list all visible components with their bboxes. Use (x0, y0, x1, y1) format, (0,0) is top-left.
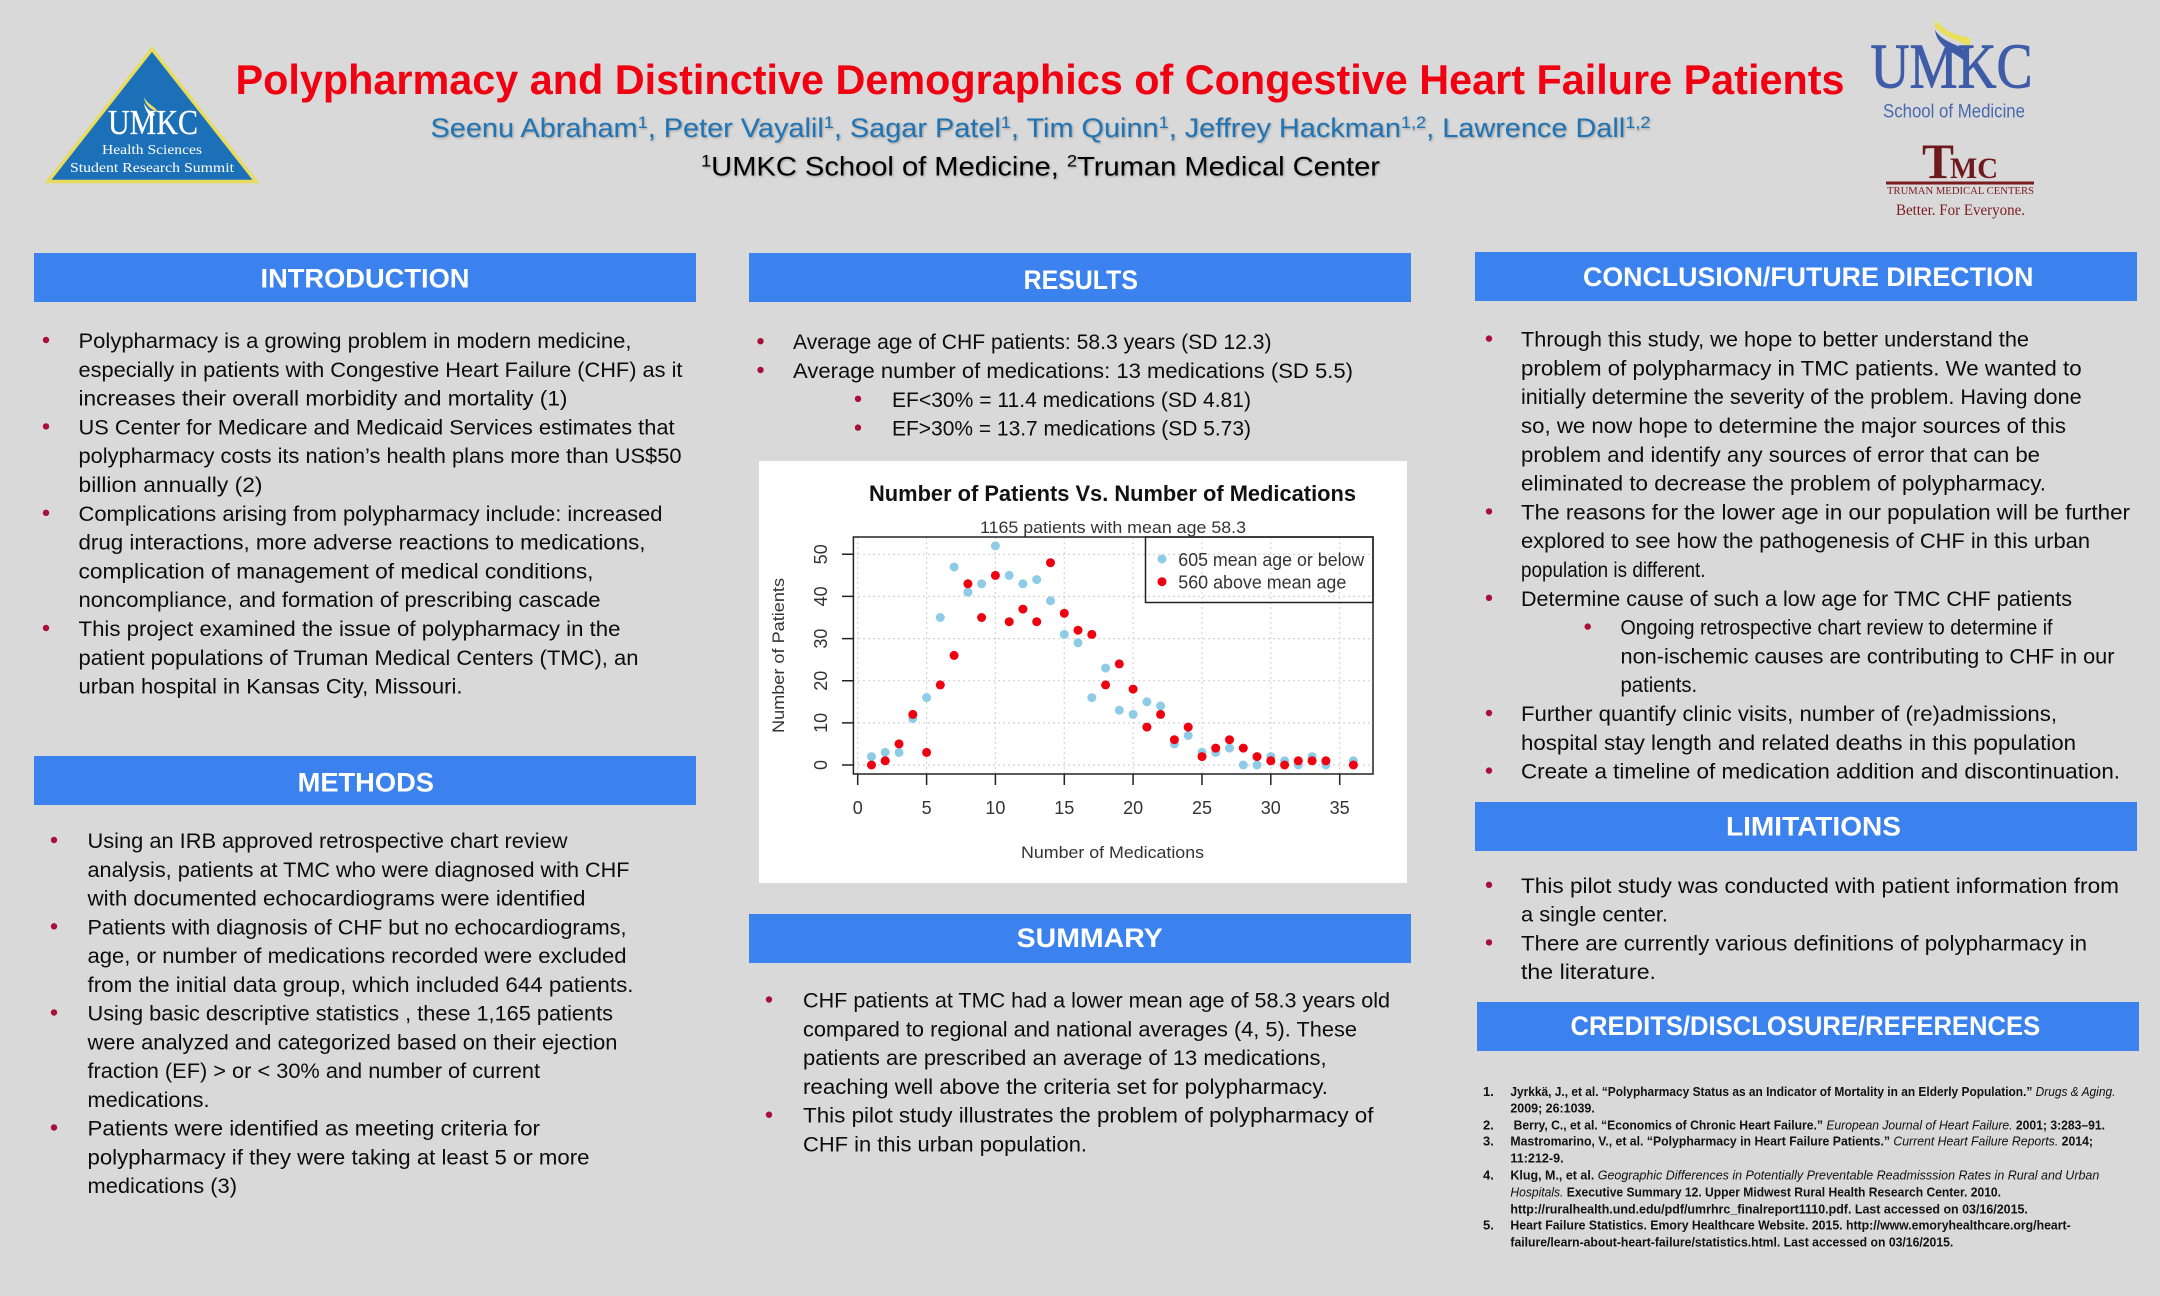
text block: conclusion bullets: Create a timeline of medication addition and discontinuation. (1521, 761, 2120, 784)
legend: 560 above mean age (1178, 572, 1346, 592)
series: 605 mean age or below (867, 541, 1358, 770)
title: Polypharmacy and Distinctive Demographics of Congestive Heart Failure Patients (236, 56, 1844, 103)
text block: conclusion bullets: eliminated to decrease the problem of polypharmacy. (1521, 473, 2046, 496)
scatter chart: number of patients vs number of medications (759, 461, 1407, 883)
reference list: 2. (1483, 1117, 1494, 1132)
authors: , Peter Vayalil (648, 113, 824, 143)
text block: conclusion bullets: initially determine the severity of the problem. Having done (1521, 386, 2082, 409)
reference list: 5. (1483, 1218, 1494, 1233)
panel: results (749, 253, 1411, 883)
text block: summary bullets: CHF patients at TMC had a lower mean age of 58.3 years old (803, 990, 1390, 1012)
text block: conclusion bullets: Ongoing retrospective chart review to determine if (1620, 617, 2053, 640)
x axis labels: 0 (853, 798, 863, 818)
reference list: Berry, C., et al. “Economics of Chronic Heart Failure.” European Journal of Heart Failure. 2001; 3:283–91. (1514, 1117, 2105, 1132)
text block: limitations bullets (1486, 875, 2119, 984)
heading: credits/disclosure/references (1477, 1002, 2139, 1051)
panel: methods (34, 756, 696, 1198)
text block: methods bullets: with documented echocardiograms were identified (86, 888, 586, 910)
text block: introduction bullets: drug interactions, more adverse reactions to medications, (78, 532, 646, 555)
y axis labels: 40 (811, 586, 831, 606)
text block: methods bullets: age, or number of medications recorded were excluded (88, 945, 626, 968)
authors: 1 (638, 113, 648, 132)
heading: introduction: INTRODUCTION (260, 264, 470, 294)
heading: conclusion/future direction (1475, 252, 2137, 301)
logo: UMKC Health Sciences Student Research Summit: UMKC (108, 103, 198, 142)
y axis labels: 10 (811, 713, 831, 733)
reference list: 11:212-9. (1510, 1150, 1564, 1165)
reference list: Jyrkkä, J., et al. “Polypharmacy Status as an Indicator of Mortality in an Elderly Population.” Drugs & Aging. (1510, 1084, 2115, 1099)
text block: introduction bullets: especially in patients with Congestive Heart Failure (CHF) as it (78, 359, 683, 382)
text block: summary bullets: patients are prescribed an average of 13 medications, (803, 1047, 1327, 1070)
text block: introduction bullets: noncompliance, and formation of prescribing cascade (78, 589, 600, 612)
text block: conclusion bullets: Through this study, we hope to better understand the (1521, 329, 2029, 352)
text block: introduction bullets: This project examined the issue of polypharmacy in the (78, 618, 620, 641)
x axis labels: 10 (985, 798, 1005, 818)
heading: methods (34, 756, 696, 805)
authors: 1 (1001, 113, 1011, 132)
affiliations: UMKC School of Medicine, (711, 152, 1067, 182)
reference list: 2009; 26:1039. (1510, 1101, 1595, 1116)
heading: results: RESULTS (1024, 265, 1138, 295)
text block: introduction bullets: billion annually (2) (78, 474, 262, 497)
authors: , Sagar Patel (834, 113, 1001, 143)
chart subtitle: 1165 patients with mean age 58.3 (980, 518, 1246, 537)
chart title: Number of Patients Vs. Number of Medications (869, 481, 1356, 506)
heading: limitations: LIMITATIONS (1726, 812, 1901, 842)
text block: introduction bullets: Complications arising from polypharmacy include: increased (78, 503, 662, 526)
authors: 1,2 (1401, 113, 1426, 132)
panel: introduction (34, 253, 696, 699)
text block: conclusion bullets: explored to see how the pathogenesis of CHF in this urban (1521, 530, 2090, 553)
affiliations: Truman Medical Center (1077, 152, 1380, 182)
x axis labels: 20 (1123, 798, 1143, 818)
legend (1146, 537, 1373, 602)
x axis labels: 5 (922, 798, 932, 818)
text block: introduction bullets: increases their overall morbidity and mortality (1) (78, 388, 568, 411)
text block: methods bullets: from the initial data group, which included 644 patients. (88, 974, 634, 997)
series: 560 above mean age (867, 558, 1358, 770)
text block: methods bullets: polypharmacy if they were taking at least 5 or more (88, 1146, 590, 1169)
text block: conclusion bullets: hospital stay length and related deaths in this population (1521, 732, 2076, 755)
text block: conclusion bullets: The reasons for the lower age in our population will be further (1521, 501, 2130, 524)
logo: UMKC Health Sciences Student Research Summit: Health Sciences (102, 143, 202, 158)
text block: conclusion bullets: Further quantify clinic visits, number of (re)admissions, (1521, 703, 2057, 726)
affiliations: 1 (701, 152, 711, 170)
text block: limitations bullets: There are currently various definitions of polypharmacy in (1521, 932, 2087, 955)
text block: methods bullets (51, 830, 634, 1198)
text block: methods bullets: fraction (EF) > or < 30% and number of current (88, 1060, 540, 1083)
reference list: 3. (1483, 1134, 1494, 1149)
logo: Truman Medical Centers: TRUMAN MEDICAL CENTERS (1887, 186, 2034, 197)
reference list: Heart Failure Statistics. Emory Healthcare Website. 2015. http://www.emoryhealthcare.org/heart- (1510, 1218, 2071, 1233)
text block: conclusion bullets: so, we now hope to determine the major sources of this (1521, 415, 2066, 438)
text block: conclusion bullets: patients. (1620, 674, 1697, 697)
text block: introduction bullets: patient populations of Truman Medical Centers (TMC), an (78, 647, 638, 670)
text block: methods bullets: medications (3) (88, 1175, 237, 1198)
x axis title: Number of Medications (1021, 843, 1204, 862)
reference list: 1. (1483, 1084, 1494, 1099)
heading: summary (749, 914, 1411, 963)
text block: introduction bullets (43, 330, 683, 699)
text block: summary bullets: This pilot study illustrates the problem of polypharmacy of (803, 1105, 1374, 1128)
text block: methods bullets: Patients with diagnosis of CHF but no echocardiograms, (88, 916, 626, 939)
text block: summary bullets: compared to regional and national averages (4, 5). These (803, 1018, 1357, 1041)
text block: introduction bullets: Polypharmacy is a growing problem in modern medicine, (78, 330, 632, 353)
affiliations: 2 (1067, 152, 1077, 170)
reference list: Mastromarino, V., et al. “Polypharmacy in Heart Failure Patients.” Current Heart Failure Reports. 2014; (1510, 1134, 2093, 1149)
panel: conclusion and future direction (1475, 252, 2137, 784)
authors: 1 (824, 113, 834, 132)
heading: credits/disclosure/references: CREDITS/DISCLOSURE/REFERENCES (1570, 1011, 2040, 1041)
y axis title: Number of Patients (769, 578, 788, 733)
authors: 1 (1159, 113, 1169, 132)
heading: limitations (1475, 802, 2137, 851)
text block: introduction bullets: US Center for Medicare and Medicaid Services estimates that (78, 416, 675, 439)
plot frame and axes (842, 537, 1373, 785)
x axis labels: 35 (1330, 798, 1350, 818)
logo: Truman Medical Centers (1886, 133, 2034, 219)
text block: summary bullets: CHF in this urban population. (803, 1134, 1087, 1156)
panel: summary (749, 914, 1411, 1156)
logo: Truman Medical Centers: T (1922, 133, 1954, 189)
text block: conclusion bullets: population is different. (1521, 559, 1706, 582)
authors: , Tim Quinn (1011, 113, 1159, 143)
heading: results (749, 253, 1411, 302)
authors: 1,2 (1625, 113, 1651, 132)
text block: conclusion bullets: non-ischemic causes are contributing to CHF in our (1620, 645, 2114, 668)
y axis labels: 50 (811, 544, 831, 564)
text block: results bullets (757, 331, 1353, 441)
logo: Truman Medical Centers: MC (1950, 152, 1998, 185)
authors: , Lawrence Dall (1426, 113, 1625, 143)
text block: conclusion bullets: Determine cause of such a low age for TMC CHF patients (1521, 588, 2072, 611)
y axis labels: 20 (811, 671, 831, 691)
reference list: 4. (1483, 1168, 1494, 1183)
logo: UMKC School of Medicine: UMKC (1870, 30, 2032, 102)
x axis labels: 15 (1054, 798, 1074, 818)
heading: methods: METHODS (298, 768, 434, 798)
logo: UMKC Health Sciences Student Research Summit: Student Research Summit (70, 161, 234, 176)
heading: summary: SUMMARY (1017, 923, 1163, 953)
reference list: Hospitals. Executive Summary 12. Upper Midwest Rural Health Research Center. 2010. (1510, 1185, 2001, 1200)
text block: methods bullets: Using basic descriptive statistics , these 1,165 patients (88, 1002, 613, 1026)
text block: results bullets: Average number of medications: 13 medications (SD 5.5) (793, 360, 1353, 383)
heading: introduction (34, 253, 696, 302)
text block: introduction bullets: urban hospital in Kansas City, Missouri. (78, 676, 462, 699)
text block: results bullets: EF>30% = 13.7 medications (SD 5.73) (892, 418, 1251, 441)
y axis labels: 30 (811, 629, 831, 649)
x axis labels (853, 798, 1350, 818)
text block: limitations bullets: This pilot study was conducted with patient information from (1521, 875, 2119, 898)
logo: UMKC Health Sciences Student Research Summit (48, 49, 256, 182)
y axis labels (811, 544, 831, 770)
panel: limitations (1475, 802, 2137, 984)
text block: summary bullets (766, 990, 1390, 1156)
legend: 605 mean age or below (1178, 550, 1365, 570)
authors: Seenu Abraham (430, 113, 624, 143)
text block: methods bullets: analysis, patients at TMC who were diagnosed with CHF (88, 859, 630, 882)
text block: conclusion bullets: problem and identify any sources of error that can be (1521, 444, 2040, 467)
text block: results bullets: EF<30% = 11.4 medications (SD 4.81) (892, 389, 1251, 412)
panel: credits, disclosure and references (1477, 1002, 2139, 1250)
text block: introduction bullets: polypharmacy costs its nation’s health plans more than US$50 (78, 445, 682, 468)
logo: UMKC School of Medicine (1870, 19, 2032, 122)
x axis labels: 25 (1192, 798, 1212, 818)
text block: methods bullets: medications. (88, 1089, 210, 1112)
authors: , Jeffrey Hackman (1169, 113, 1401, 143)
text block: summary bullets: reaching well above the criteria set for polypharmacy. (803, 1076, 1328, 1099)
text block: conclusion bullets (1486, 329, 2130, 784)
reference list (1483, 1084, 2115, 1250)
text block: methods bullets: Using an IRB approved retrospective chart review (88, 830, 568, 853)
reference list: http://ruralhealth.und.edu/pdf/umrhrc_finalreport1110.pdf. Last accessed on 03/16/2015. (1510, 1201, 2028, 1216)
text block: methods bullets: were analyzed and categorized based on their ejection (86, 1031, 618, 1054)
reference list: Klug, M., et al. Geographic Differences in Potentially Preventable Readmisssion Rates in Rural and Urban (1510, 1168, 2099, 1183)
text block: limitations bullets: the literature. (1521, 961, 1656, 984)
y axis labels: 0 (811, 760, 831, 770)
text block: introduction bullets: complication of management of medical conditions, (78, 560, 594, 583)
text block: limitations bullets: a single center. (1521, 904, 1668, 927)
heading: conclusion/future direction: CONCLUSION/FUTURE DIRECTION (1583, 262, 2034, 292)
reference list: failure/learn-about-heart-failure/statistics.html. Last accessed on 03/16/2015. (1510, 1235, 1953, 1250)
text block: results bullets: Average age of CHF patients: 58.3 years (SD 12.3) (793, 331, 1272, 354)
text block: methods bullets: Patients were identified as meeting criteria for (88, 1118, 540, 1140)
text block: conclusion bullets: problem of polypharmacy in TMC patients. We wanted to (1521, 357, 2082, 380)
logo: Truman Medical Centers: Better. For Everyone. (1896, 202, 2025, 219)
logo: UMKC School of Medicine: School of Medicine (1883, 102, 2025, 122)
x axis labels: 30 (1261, 798, 1281, 818)
